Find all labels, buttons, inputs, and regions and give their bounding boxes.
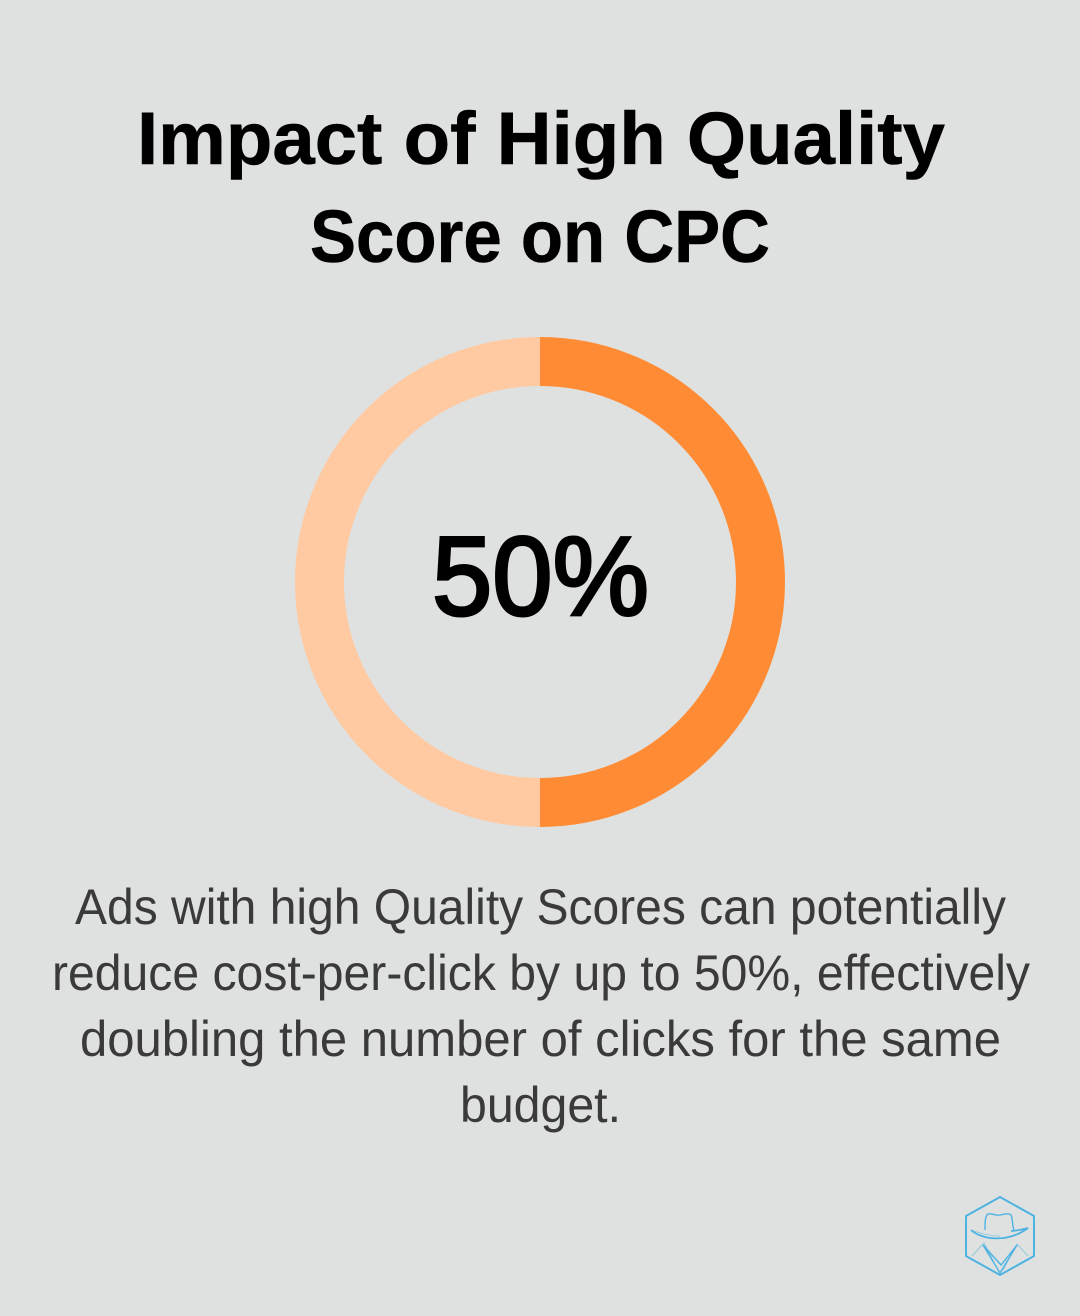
description text: budget. bbox=[460, 1077, 621, 1133]
icon: logo hexagon with hat bbox=[966, 1197, 1034, 1275]
description text: reduce cost-per-click by up to 50%, effectively bbox=[52, 945, 1030, 1001]
description text: Ads with high Quality Scores can potentially bbox=[75, 879, 1006, 935]
title: Score on CPC bbox=[310, 195, 770, 278]
title bbox=[137, 97, 945, 278]
title: Impact of High Quality bbox=[137, 97, 945, 180]
remaining segment bbox=[320, 362, 540, 802]
donut value: 50% bbox=[432, 514, 649, 639]
description text bbox=[52, 879, 1030, 1133]
description text: doubling the number of clicks for the same bbox=[80, 1011, 1001, 1067]
donut chart: 50% bbox=[320, 362, 760, 802]
highlighted segment bbox=[540, 362, 760, 802]
